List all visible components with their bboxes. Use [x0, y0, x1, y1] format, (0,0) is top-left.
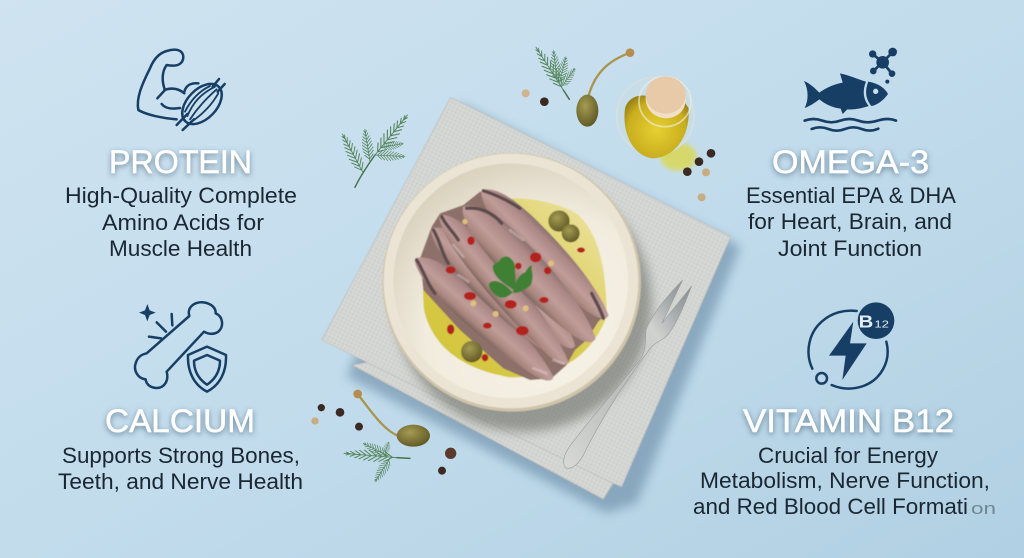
panel: protein [65, 50, 297, 261]
central food photo [311, 44, 741, 513]
chili flakes [446, 236, 585, 361]
icon: energy bolt with B12 badge: B [859, 311, 873, 331]
icon: energy bolt with B12 badge: 12 [874, 320, 890, 331]
bowl [382, 153, 641, 412]
bowl shadow [395, 175, 652, 432]
icon: flexed arm and muscle [138, 50, 229, 131]
icon: fish, waves and molecule [804, 48, 897, 131]
dill sprig bottom [344, 439, 410, 484]
text: vitamin b12 description: Metabolism, Nerve Function, [700, 468, 990, 493]
dill sprig left [337, 111, 412, 187]
bottom caper with stem [353, 390, 430, 447]
dill sprig top [531, 44, 578, 99]
anchovy fillets [405, 177, 620, 391]
text: protein description [65, 183, 297, 261]
panel: vitamin b12 [693, 302, 996, 519]
text: protein description: High-Quality Complete [65, 183, 297, 208]
heading: calcium: CALCIUM [105, 403, 255, 439]
text: calcium description [58, 443, 303, 494]
text: vitamin b12 description: and Red Blood Cell Formati [693, 494, 968, 519]
panel: omega-3 [746, 48, 956, 261]
parsley garnish [489, 256, 533, 298]
text: vitamin b12 description: on [971, 499, 996, 518]
text: omega-3 description: for Heart, Brain, and [748, 209, 952, 234]
olive oil jar [617, 76, 697, 171]
napkin [322, 97, 731, 499]
olive oil pool [423, 198, 607, 377]
text: vitamin b12 description [693, 443, 996, 519]
napkin shadow [347, 103, 741, 513]
text: protein description: Muscle Health [109, 236, 252, 261]
text: omega-3 description: Essential EPA & DHA [746, 183, 956, 208]
text: vitamin b12 description: Crucial for Energy [758, 443, 939, 468]
icon: energy bolt with B12 badge [809, 302, 894, 389]
icon: bone, shield and sparkle [135, 302, 226, 392]
chili seeds [462, 219, 554, 317]
text: protein description: Amino Acids for [102, 210, 265, 235]
top caper with stem [576, 48, 634, 127]
fork [564, 280, 692, 468]
heading: protein: PROTEIN [109, 144, 252, 180]
panel: calcium [58, 302, 303, 494]
text: omega-3 description: Joint Function [778, 236, 922, 261]
capers in oil [461, 210, 580, 362]
text: omega-3 description [746, 183, 956, 261]
text: calcium description: Supports Strong Bones, [62, 443, 300, 468]
peppercorns [311, 89, 715, 475]
heading: vitamin b12: VITAMIN B12 [743, 403, 954, 439]
text: calcium description: Teeth, and Nerve Health [58, 469, 303, 494]
heading: omega-3: OMEGA-3 [772, 144, 929, 180]
